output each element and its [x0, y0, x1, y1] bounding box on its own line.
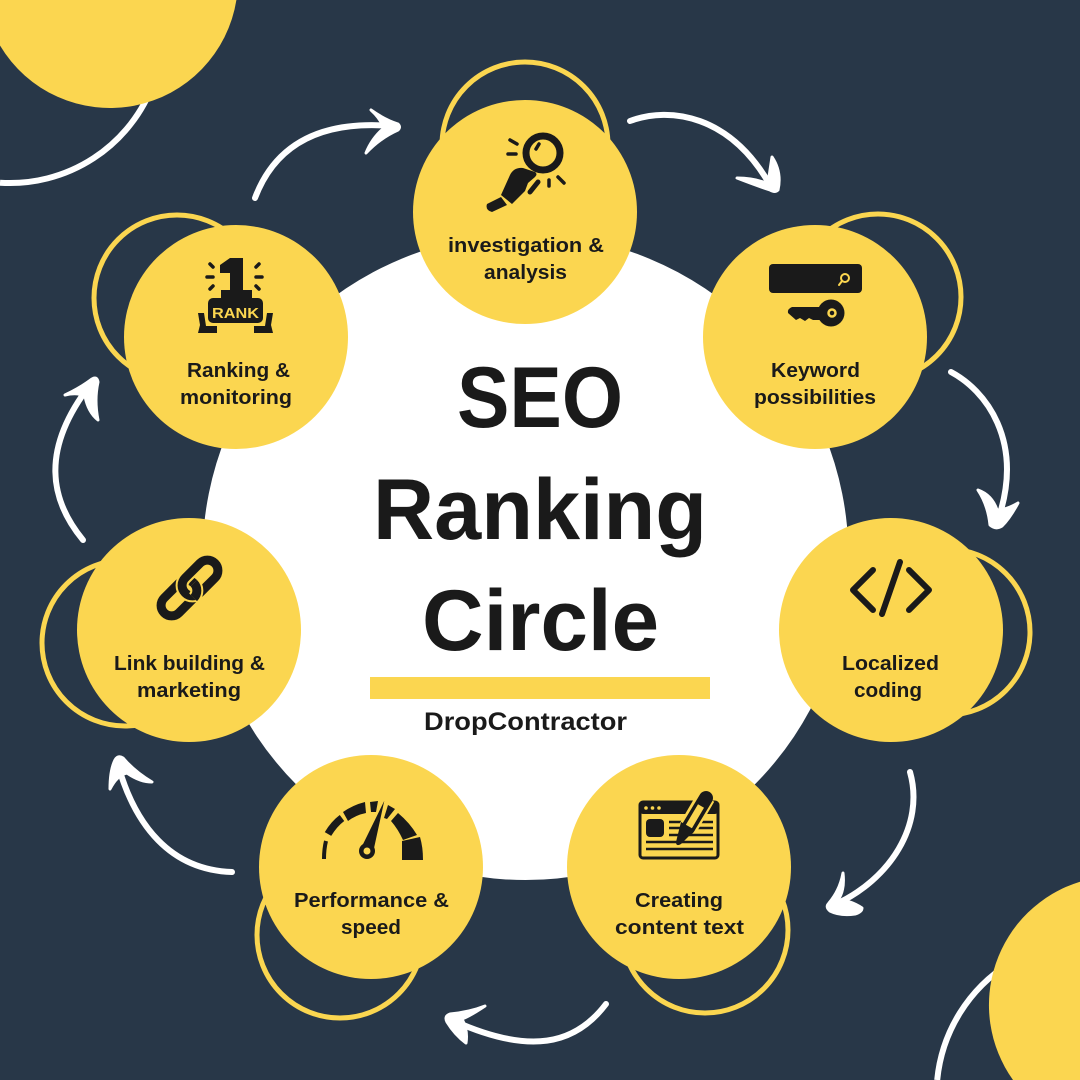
icon: code brackets [853, 562, 929, 614]
panel: localized coding: Localized [842, 653, 939, 675]
panel: link building and marketing: Link building & [114, 653, 265, 675]
title [373, 350, 707, 669]
panel: performance and speed [257, 755, 483, 1018]
panel: keyword possibilities [703, 214, 961, 449]
arrow: performance to link [110, 757, 232, 872]
title: Ranking [373, 462, 707, 558]
icon: number one rank badge [198, 258, 273, 333]
panel: ranking and monitoring: monitoring [180, 387, 292, 409]
panel: investigation and analysis: investigation & [448, 235, 604, 257]
panel: ranking and monitoring: Ranking & [187, 360, 290, 382]
panel: performance and speed: Performance & [294, 890, 449, 912]
panel: investigation and analysis [413, 62, 637, 324]
icon: speedometer gauge [324, 793, 423, 860]
icon: browser window and pencil [640, 797, 718, 858]
arrow: creating to performance [446, 1004, 606, 1043]
arrow: keyword to localized [951, 372, 1018, 528]
central white circle [202, 234, 848, 880]
title: SEO [457, 350, 623, 446]
title underline bar [370, 677, 710, 699]
icon: chain link [157, 556, 222, 620]
panel: localized coding [779, 518, 1030, 742]
icon: number one rank badge: RANK [212, 305, 259, 322]
panel: keyword possibilities: possibilities [754, 387, 876, 409]
panel: link building and marketing: marketing [137, 680, 241, 702]
panel: localized coding: coding [854, 680, 922, 702]
panel: investigation and analysis: analysis [484, 262, 567, 284]
panel: keyword possibilities: Keyword [771, 360, 860, 382]
panel: creating content text [567, 755, 791, 1013]
panel: creating content text: Creating [635, 890, 723, 912]
panel: creating content text: content text [615, 917, 744, 939]
panel: link building and marketing [42, 518, 301, 742]
corner decoration: bottom right [937, 882, 1080, 1080]
icon: magnifier held by hand [487, 136, 564, 212]
arrow: ranking to investigation [255, 110, 400, 198]
brand name: DropContractor [424, 708, 627, 736]
title: Circle [422, 573, 659, 669]
icon: search bar and key [769, 264, 862, 326]
corner decoration: top left [0, 0, 236, 183]
panel: ranking and monitoring [94, 215, 348, 449]
arrow: link to ranking [55, 378, 98, 540]
arrow: localized to creating [827, 772, 913, 915]
panel: performance and speed: speed [341, 917, 401, 939]
arrow: investigation to keyword [630, 115, 779, 192]
